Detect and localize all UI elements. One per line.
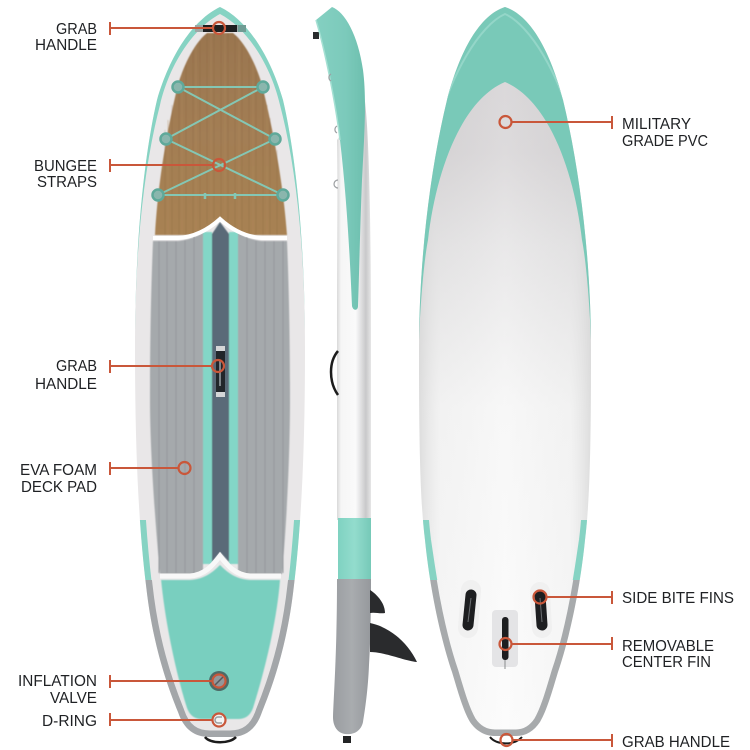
callout: grab handle center: GRAB [56, 358, 97, 375]
tail strap [343, 736, 351, 743]
callout: inflation valve: VALVE [50, 690, 97, 707]
callout: bungee straps: STRAPS [37, 174, 97, 191]
side fins [370, 590, 417, 662]
callout: eva foam deck pad [20, 462, 190, 496]
left side fin box [468, 590, 471, 628]
callout: inflation valve [18, 673, 226, 707]
callout: eva foam deck pad: DECK PAD [21, 479, 97, 496]
wood nose deck [155, 33, 287, 235]
callout: eva foam deck pad: EVA FOAM [20, 462, 97, 479]
board: underside view [419, 7, 591, 744]
center notch white lines [153, 219, 287, 238]
callout: side bite fins [534, 590, 734, 607]
center fin box [492, 610, 518, 669]
side carry handle [331, 351, 338, 395]
side teal nose [316, 7, 365, 310]
teal tail pad [161, 565, 280, 719]
under tail handle [490, 737, 522, 743]
callout: military grade pvc: MILITARY [622, 116, 691, 133]
callout: removable center fin [500, 637, 714, 671]
board: side profile view [313, 7, 417, 743]
callout: grab handle nose: GRAB [56, 21, 97, 38]
icon: center grab handle [216, 346, 225, 397]
callout: d-ring: D-RING [42, 713, 97, 730]
callout: removable center fin: CENTER FIN [622, 654, 711, 671]
bungee straps [158, 87, 283, 199]
callout: grab handle nose: HANDLE [35, 37, 97, 54]
side white body [337, 95, 371, 520]
side d-rings [329, 74, 338, 188]
callout: bungee straps: BUNGEE [34, 158, 97, 175]
callout: military grade pvc [500, 116, 708, 150]
right side fin box [540, 592, 542, 628]
board: top deck view [135, 7, 305, 744]
icon: inflation valve [209, 671, 229, 691]
callout: removable center fin: REMOVABLE [622, 638, 714, 655]
callout: d-ring [42, 713, 226, 730]
callout: grab handle center [35, 358, 224, 393]
icon: nose grab handle [195, 25, 246, 32]
gray EVA foam deck pad [150, 222, 290, 574]
side gray tail [333, 579, 371, 734]
callout: grab handle center: HANDLE [35, 376, 97, 393]
callout: side bite fins: SIDE BITE FINS [622, 590, 734, 607]
bungee rings [152, 82, 288, 200]
callout: military grade pvc: GRADE PVC [622, 133, 708, 150]
callout: grab handle nose [35, 21, 225, 54]
callout: grab handle tail [500, 734, 730, 750]
icon: tail handle [205, 737, 236, 742]
icon: d-ring [212, 713, 226, 727]
teal nose panel [419, 7, 591, 339]
side teal band [338, 518, 371, 579]
callout: inflation valve: INFLATION [18, 673, 97, 690]
side handle top [313, 32, 319, 39]
callout: bungee straps [34, 158, 225, 191]
